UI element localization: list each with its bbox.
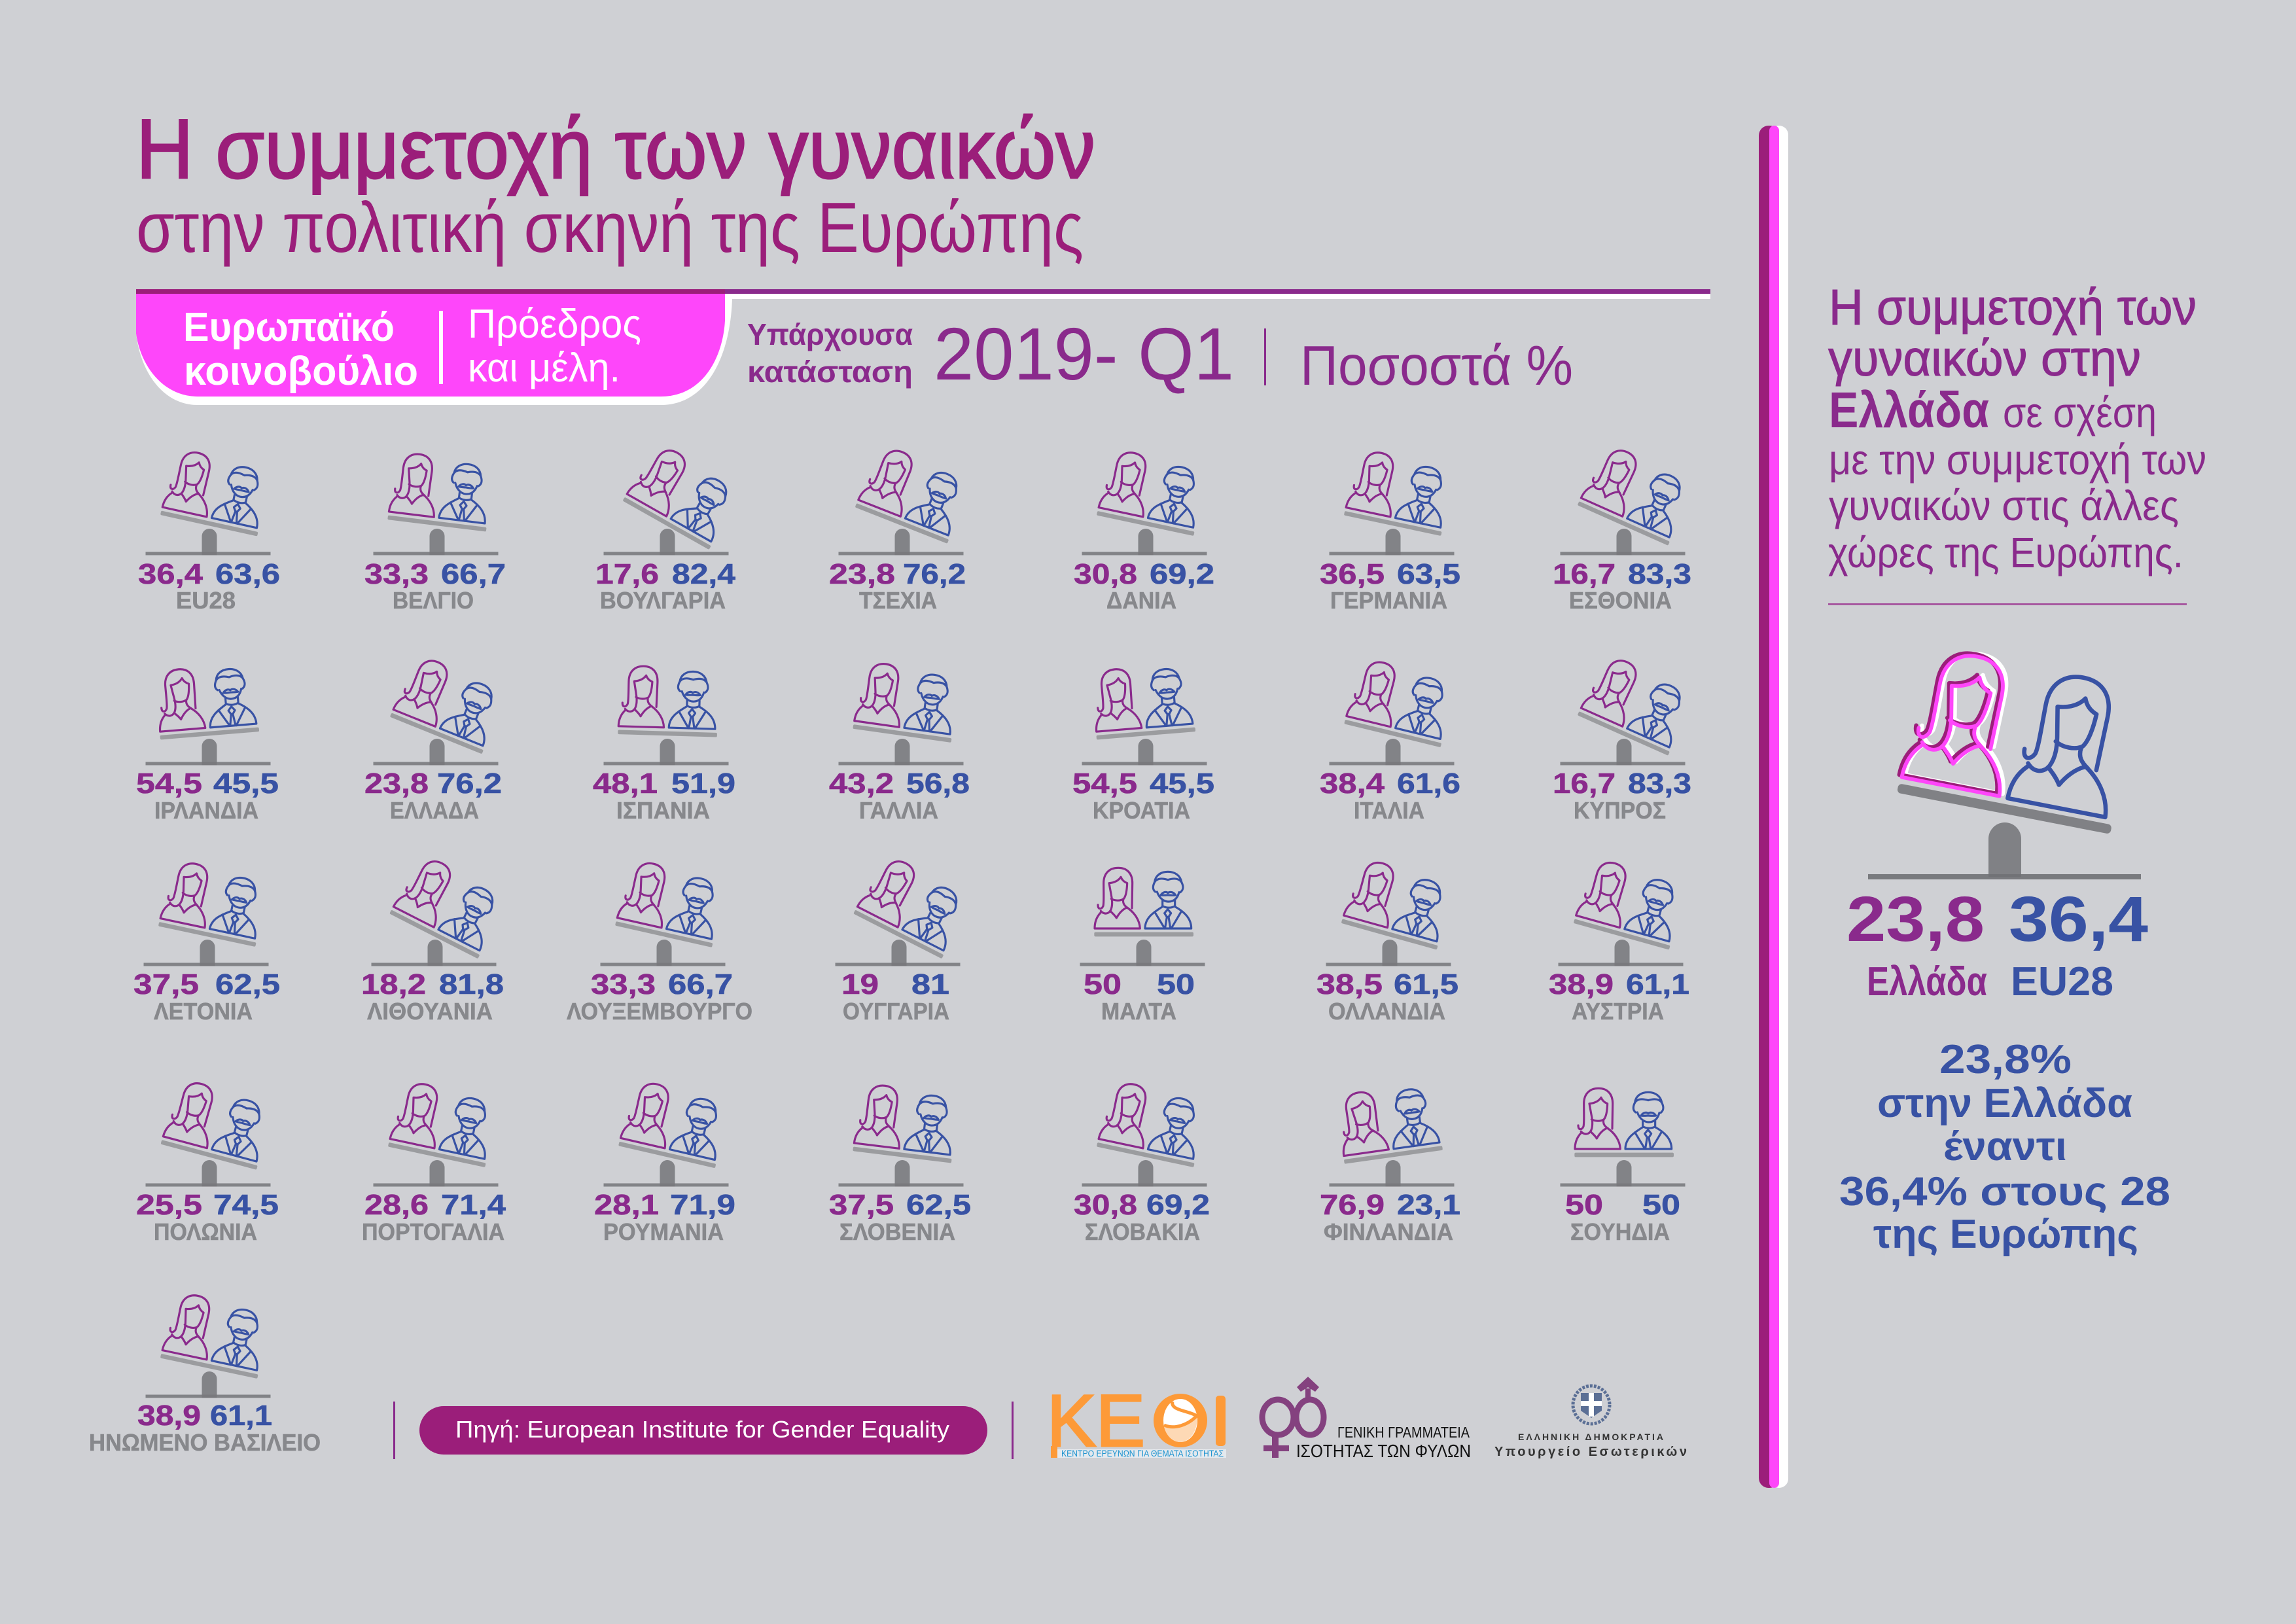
title: Η συμμετοχή των γυναικών: [136, 102, 1095, 196]
scale: Cyprus: [1553, 652, 1696, 824]
source pill: Πηγή: European Institute for Gender Equality: [455, 1416, 949, 1443]
logo: KETHI: ΚΕΝΤΡΟ ΕΡΕΥΝΩΝ ΓΙΑ ΘΕΜΑΤΑ ΙΣΟΤΗΤΑΣ: [1061, 1448, 1224, 1458]
header band: Πρόεδρος: [468, 302, 641, 347]
scale: Netherlands: ΟΛΛΑΝΔΙΑ: [1328, 998, 1445, 1025]
scale: Denmark: 30,8: [1074, 558, 1137, 590]
scale: Sweden: ΣΟΥΗΔΙΑ: [1570, 1218, 1670, 1245]
scale: Cyprus: 83,3: [1628, 768, 1691, 800]
big values: Ελλάδα: [1867, 959, 1987, 1004]
logo: General Secretariat for Gender Equality: ΓΕΝΙΚΗ ΓΡΑΜΜΑΤΕΙΑ: [1337, 1424, 1470, 1441]
scale: Croatia: ΚΡΟΑΤΙΑ: [1093, 797, 1190, 824]
current status heading: 2019- Q1: [934, 313, 1234, 395]
scale: Sweden: 50: [1565, 1189, 1603, 1221]
source pill: [393, 1402, 1014, 1459]
panel: Greece intro text: Η συμμετοχή των: [1829, 279, 2197, 336]
scale: Germany: [1320, 448, 1460, 614]
comparison text: έναντι: [1943, 1124, 2067, 1169]
header band: και μέλη.: [468, 345, 620, 391]
panel: Greece intro text: με την συμμετοχή των: [1829, 436, 2206, 484]
scale: Croatia: 54,5: [1072, 768, 1137, 800]
scale: Slovakia: ΣΛΟΒΑΚΙΑ: [1085, 1218, 1200, 1245]
scale: Austria: 38,9: [1549, 968, 1614, 1000]
scale: United Kingdom: ΗΝΩΜΕΝΟ ΒΑΣΙΛΕΙΟ: [89, 1429, 321, 1456]
scale: Lithuania: 81,8: [439, 968, 504, 1000]
scale: Luxembourg: 66,7: [668, 968, 733, 1000]
scale: Poland: [136, 1078, 279, 1245]
scale: Greece: 23,8: [364, 768, 429, 800]
comparison text: 23,8%: [1939, 1037, 2072, 1082]
scale: Italy: 61,6: [1397, 768, 1460, 800]
scale: Denmark: ΔΑΝΙΑ: [1106, 587, 1176, 614]
current status heading: [747, 313, 1573, 397]
scale: Bulgaria: ΒΟΥΛΓΑΡΙΑ: [600, 587, 726, 614]
scale: Latvia: [133, 859, 280, 1025]
scale: Spain: ΙΣΠΑΝΙΑ: [616, 797, 710, 824]
scale: Croatia: [1072, 663, 1214, 824]
vertical divider: [1759, 126, 1788, 1488]
scale: Belgium: 33,3: [364, 558, 429, 590]
logo: Hellenic Republic Ministry of Interior: ΕΛΛΗΝΙΚΗ ΔΗΜΟΚΡΑΤΙΑ: [1518, 1432, 1663, 1442]
scale: Malta: 50: [1157, 968, 1195, 1000]
scale: Sweden: [1560, 1088, 1686, 1245]
scale: Czechia: ΤΣΕΧΙΑ: [859, 587, 937, 614]
scale: Spain: [593, 665, 735, 824]
scale: Italy: 38,4: [1320, 768, 1385, 800]
scale: Germany: 36,5: [1320, 558, 1385, 590]
scale: Bulgaria: 17,6: [595, 558, 659, 590]
scale: France: 43,2: [829, 768, 894, 800]
scale: Hungary: ΟΥΓΓΑΡΙΑ: [843, 998, 949, 1025]
scale: Slovenia: [829, 1083, 971, 1245]
scale: Ireland: [136, 663, 279, 824]
scale: Sweden: 50: [1642, 1189, 1680, 1221]
scale: Germany: ΓΕΡΜΑΝΙΑ: [1330, 587, 1447, 614]
scale: Finland: [1320, 1082, 1460, 1245]
scale: Austria: [1549, 857, 1689, 1025]
scale: EU28: EU28: [176, 587, 236, 614]
scale: Romania: ΡΟΥΜΑΝΙΑ: [603, 1218, 724, 1245]
scale: Slovakia: 30,8: [1074, 1189, 1137, 1221]
scale: Latvia: 62,5: [215, 968, 280, 1000]
panel: Greece intro text: γυναικών στην: [1828, 330, 2141, 387]
panel: Greece intro text: [1828, 279, 2206, 605]
big values: 36,4: [2009, 883, 2148, 955]
big values: EU28: [2011, 959, 2113, 1004]
scale: Belgium: 66,7: [441, 558, 506, 590]
scale: Denmark: [1074, 448, 1214, 614]
logo: Hellenic Republic Ministry of Interior: [1494, 1386, 1687, 1459]
scale: Slovenia: 62,5: [906, 1189, 971, 1221]
panel: Greece intro text: Ελλάδα: [1829, 382, 1989, 438]
scale: United Kingdom: 61,1: [210, 1400, 272, 1432]
scale: Czechia: [829, 444, 972, 614]
scale: Malta: 50: [1084, 968, 1122, 1000]
scale: Estonia: 16,7: [1553, 558, 1616, 590]
scale: United Kingdom: 38,9: [137, 1400, 201, 1432]
header band: [136, 289, 1710, 405]
scale: Malta: ΜΑΛΤΑ: [1101, 998, 1176, 1025]
scale: Italy: ΙΤΑΛΙΑ: [1354, 797, 1424, 824]
scale: United Kingdom: [89, 1291, 321, 1456]
scale: Poland: ΠΟΛΩΝΙΑ: [154, 1218, 257, 1245]
scale: Estonia: ΕΣΘΟΝΙΑ: [1569, 587, 1672, 614]
scale: Netherlands: [1316, 857, 1458, 1025]
scale: Finland: 76,9: [1320, 1189, 1385, 1221]
scale: Finland: 23,1: [1397, 1189, 1460, 1221]
scale: Bulgaria: 82,4: [672, 558, 736, 590]
current status heading: κατάσταση: [747, 355, 913, 389]
logo: General Secretariat for Gender Equality: [1262, 1377, 1471, 1461]
scale: Lithuania: [361, 853, 509, 1025]
big values: 23,8: [1846, 883, 1985, 955]
comparison text: της Ευρώπης: [1873, 1212, 2138, 1257]
scale: Malta: [1080, 868, 1205, 1025]
title: στην πολιτική σκηνή της Ευρώπης: [136, 188, 1084, 268]
scale: Czechia: 23,8: [829, 558, 895, 590]
scale: Greece: [364, 653, 508, 824]
scale: Spain: 51,9: [671, 768, 735, 800]
scale: Bulgaria: [595, 441, 743, 614]
scale: Luxembourg: [567, 858, 752, 1025]
current status heading: Ποσοστά %: [1300, 335, 1573, 397]
scale: Ireland: 54,5: [136, 768, 202, 800]
panel: countries grid: [89, 441, 1696, 1456]
scale: Estonia: 83,3: [1628, 558, 1691, 590]
scale: Portugal: ΠΟΡΤΟΓΑΛΙΑ: [362, 1218, 504, 1245]
scale: Portugal: 71,4: [441, 1189, 506, 1221]
scale: Hungary: 19: [841, 968, 879, 1000]
scale: France: [829, 661, 970, 824]
scale: Romania: 71,9: [670, 1189, 735, 1221]
panel: Greece intro text: σε σχέση: [2003, 389, 2157, 436]
title: [136, 102, 1095, 268]
scale: Cyprus: ΚΥΠΡΟΣ: [1574, 797, 1666, 824]
scale: EU28: 63,6: [215, 558, 280, 590]
scale: Hungary: [835, 853, 973, 1025]
scale: Poland: 74,5: [213, 1189, 279, 1221]
scale: France: 56,8: [906, 768, 970, 800]
scale: Latvia: 37,5: [133, 968, 199, 1000]
scale: Czechia: 76,2: [903, 558, 966, 590]
logo: General Secretariat for Gender Equality: ΙΣΟΤΗΤΑΣ ΤΩΝ ΦΥΛΩΝ: [1296, 1441, 1471, 1461]
scale: Austria: 61,1: [1626, 968, 1689, 1000]
scale: Austria: ΑΥΣΤΡΙΑ: [1572, 998, 1664, 1025]
header band: κοινοβούλιο: [184, 349, 418, 394]
scale: Greece: 76,2: [437, 768, 502, 800]
scale: Cyprus: 16,7: [1553, 768, 1616, 800]
comparison text: [1839, 1037, 2170, 1257]
scale: Greece: ΕΛΛΑΔΑ: [390, 797, 479, 824]
scale: Slovenia: 37,5: [829, 1189, 894, 1221]
header band: Ευρωπαϊκό: [183, 305, 395, 350]
scale: Belgium: ΒΕΛΓΙΟ: [393, 587, 474, 614]
logo: Hellenic Republic Ministry of Interior: Υπουργείο Εσωτερικών: [1494, 1445, 1687, 1459]
scale: Slovenia: ΣΛΟΒΕΝΙΑ: [839, 1218, 955, 1245]
panel: Greece intro text: χώρες της Ευρώπης.: [1828, 529, 2183, 576]
scale: Finland: ΦΙΝΛΑΝΔΙΑ: [1324, 1218, 1453, 1245]
logo: KETHI: ΚΕ: [1047, 1380, 1145, 1462]
scale: Portugal: [362, 1080, 506, 1245]
scale: Croatia: 45,5: [1150, 768, 1214, 800]
scale: Poland: 25,5: [136, 1189, 202, 1221]
scale: Ireland: 45,5: [213, 768, 279, 800]
scale: Latvia: ΛΕΤΟΝΙΑ: [154, 998, 253, 1025]
scale: Romania: 28,1: [594, 1189, 659, 1221]
scale: Netherlands: 38,5: [1316, 968, 1383, 1000]
comparison text: 36,4% στους 28: [1839, 1169, 2170, 1214]
scale: Estonia: [1553, 442, 1696, 614]
scale: Belgium: [364, 451, 506, 614]
scale: Romania: [594, 1079, 735, 1245]
scale: France: ΓΑΛΛΙΑ: [859, 797, 938, 824]
scale: Slovakia: [1074, 1080, 1210, 1245]
scale: Denmark: 69,2: [1150, 558, 1214, 590]
scale: Netherlands: 61,5: [1394, 968, 1458, 1000]
scale: Lithuania: ΛΙΘΟΥΑΝΙΑ: [367, 998, 493, 1025]
scale: Spain: 48,1: [593, 768, 658, 800]
big values: [1846, 883, 2148, 1004]
scale: EU28: 36,4: [138, 558, 203, 590]
comparison text: στην Ελλάδα: [1877, 1081, 2132, 1126]
scale: Luxembourg: ΛΟΥΞΕΜΒΟΥΡΓΟ: [567, 998, 752, 1025]
icon: big balance Greece vs EU28: [1868, 643, 2141, 879]
scale: Ireland: ΙΡΛΑΝΔΙΑ: [154, 797, 258, 824]
scale: Germany: 63,5: [1397, 558, 1460, 590]
scale: EU28: [138, 448, 280, 614]
scale: Slovakia: 69,2: [1146, 1189, 1210, 1221]
current status heading: Υπάρχουσα: [747, 317, 913, 351]
scale: Italy: [1320, 657, 1460, 824]
scale: Luxembourg: 33,3: [591, 968, 656, 1000]
logo: KETHI: [1047, 1380, 1226, 1462]
panel: Greece intro text: γυναικών στις άλλες: [1829, 482, 2179, 529]
scale: Portugal: 28,6: [364, 1189, 429, 1221]
scale: Lithuania: 18,2: [361, 968, 426, 1000]
scale: Hungary: 81: [911, 968, 949, 1000]
